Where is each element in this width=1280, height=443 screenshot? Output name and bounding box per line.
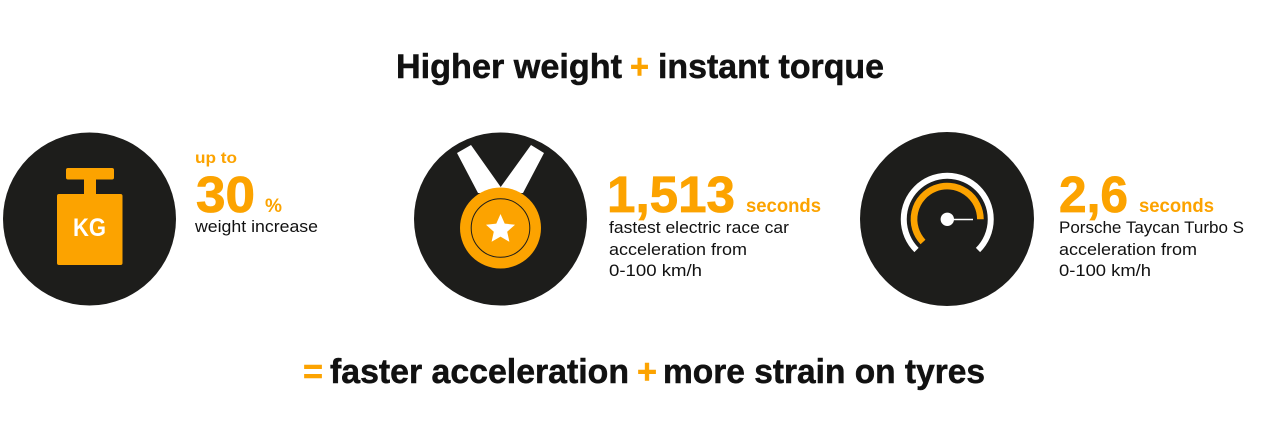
text: Porsche description: Porsche Taycan Turbo S xyxy=(1059,218,1244,237)
icon: speedometer xyxy=(860,132,1034,306)
stat: 30 %: % xyxy=(265,196,282,217)
stat: 1,513 seconds xyxy=(607,166,821,223)
conclusion heading: + xyxy=(637,353,657,391)
title xyxy=(396,48,884,86)
icon: weight: KG xyxy=(73,214,106,242)
text: Porsche description: 0-100 km/h xyxy=(1059,261,1151,280)
panel: race car xyxy=(414,132,821,306)
stat: 30 % xyxy=(195,150,282,223)
stat: 1,513 seconds: seconds xyxy=(746,196,821,217)
text: race car description: 0-100 km/h xyxy=(609,261,702,280)
text: race car description: acceleration from xyxy=(609,240,747,259)
text: weight increase: weight increase xyxy=(194,217,318,236)
conclusion heading xyxy=(303,353,985,391)
stat: 2,6 seconds: 2,6 xyxy=(1059,166,1128,223)
conclusion heading: = xyxy=(303,353,323,391)
text: race car description: fastest electric race car xyxy=(609,218,789,237)
text: Porsche description xyxy=(1059,218,1244,280)
icon: medal xyxy=(414,132,587,306)
panel: Porsche xyxy=(860,132,1244,306)
stat: 30 %: 30 xyxy=(196,166,255,223)
title: instant torque xyxy=(658,48,884,86)
stat: 30 %: up to xyxy=(195,150,237,167)
text: Porsche description: acceleration from xyxy=(1059,240,1197,259)
conclusion heading: faster acceleration xyxy=(330,353,629,391)
title: Higher weight xyxy=(396,48,622,86)
stat: 2,6 seconds xyxy=(1059,166,1214,223)
stat: 2,6 seconds: seconds xyxy=(1139,196,1214,217)
title: + xyxy=(630,48,649,86)
text: race car description xyxy=(609,218,789,280)
stat: 1,513 seconds: 1,513 xyxy=(607,166,735,223)
icon: weight xyxy=(3,132,176,306)
panel: weight xyxy=(3,132,318,306)
conclusion heading: more strain on tyres xyxy=(663,353,985,391)
